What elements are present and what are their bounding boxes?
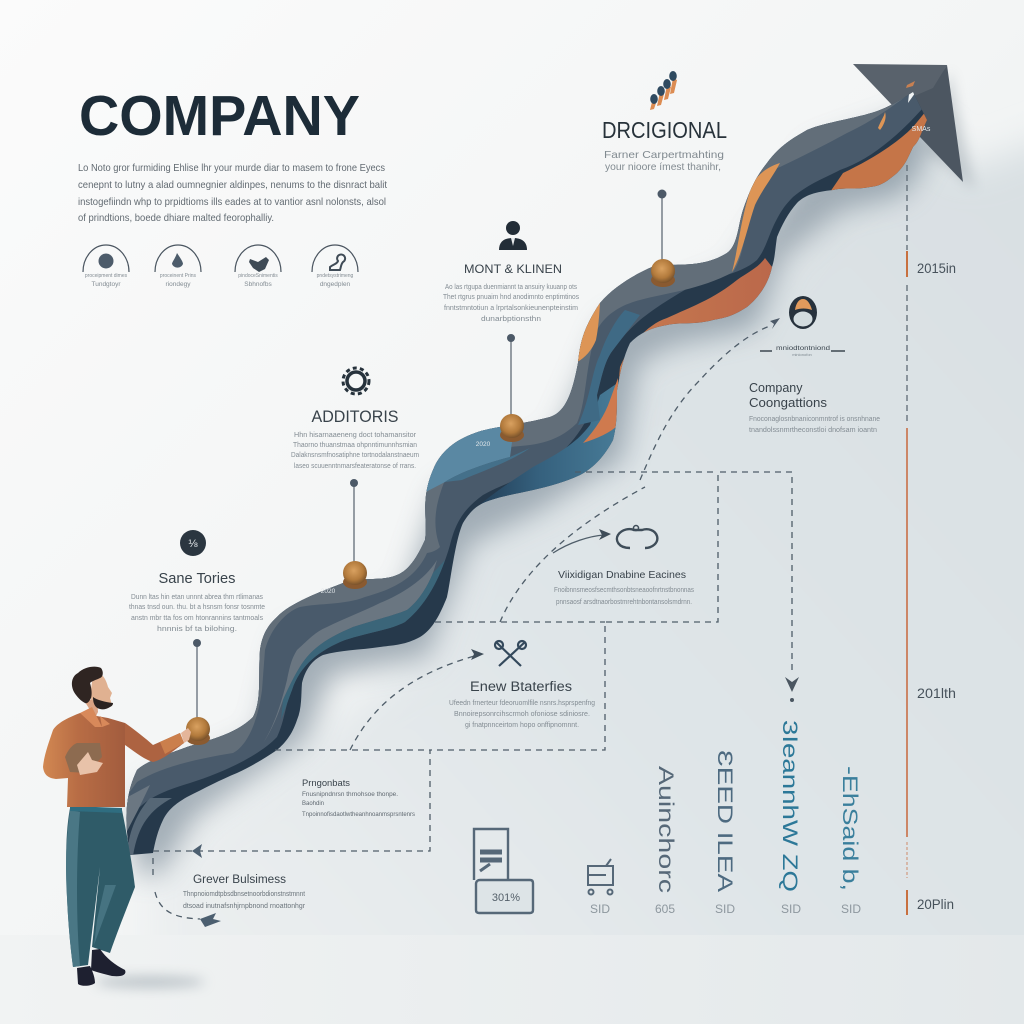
description: Ufeedn frnerteur fdeoruomlfile nsnrs.hsprspenfng xyxy=(449,700,595,707)
text block: Grever Bulsimess xyxy=(183,874,306,910)
arrow head xyxy=(853,64,975,190)
description xyxy=(183,891,306,910)
description: Thet rtgrus pnuaim hnd anodimnto enptimtinos xyxy=(443,294,579,301)
icon: percent badge xyxy=(180,530,206,556)
beard xyxy=(93,697,113,709)
text block: Vixidigan Dnabine Eacines xyxy=(554,569,694,606)
ribbon: orange highlights xyxy=(577,112,886,362)
shirt body xyxy=(43,713,125,807)
right sleeve xyxy=(125,723,184,762)
icon: person xyxy=(499,221,527,250)
icon: handshake gauge xyxy=(235,245,281,288)
icon: cart xyxy=(588,859,613,894)
icon: rising bars xyxy=(650,71,677,110)
icon: figure gauge xyxy=(312,245,358,288)
description: laseo scuuenntnmarsfeateratonse of rrans. xyxy=(294,463,416,470)
icon: padlock: mniodtontniond xyxy=(776,345,830,352)
icon: crossed tools xyxy=(495,641,526,666)
bottom value labels xyxy=(590,902,861,916)
collar xyxy=(80,707,110,727)
text block: Grever Bulsimess: Grever Bulsimess xyxy=(193,874,286,886)
text block: Enew Btaterfies xyxy=(449,679,595,729)
description xyxy=(554,587,694,606)
text block: Company Congoattions: Coongattions xyxy=(749,396,827,410)
figure: man xyxy=(43,667,205,988)
milestone pin 4 xyxy=(651,190,675,287)
icon: handshake gauge: pindoceSnimentis xyxy=(238,273,278,279)
text block: Enew Btaterfies: Enew Btaterfies xyxy=(470,679,572,694)
folder value: 301% xyxy=(492,892,520,904)
arrow label: SMAs xyxy=(912,126,931,133)
description: gi fnatpnnceirtom hopo onffipnomnnt. xyxy=(465,722,579,729)
intro paragraph: Lo Noto gror furmiding Ehlise lhr your murde diar to masem to frone Eyecs xyxy=(78,162,385,174)
ribbon: navy base xyxy=(126,94,926,855)
description: Ao las rtgupa duenmiannt ta ansuiry kuuanp ots xyxy=(445,284,577,291)
description: dtsoad inutnafsnhjrnpbnond rnoattonhgr xyxy=(183,903,306,910)
cuff xyxy=(160,733,184,754)
milestone pin 2 xyxy=(343,479,367,589)
curved dashed arrow: return xyxy=(153,858,221,927)
bottom value labels: SID xyxy=(841,902,861,916)
description: Dalaknsnsmfnosatiphne tortnodalanstnaeum xyxy=(291,452,419,459)
bottom value labels: 605 xyxy=(655,902,675,916)
face xyxy=(90,675,112,705)
arrow: left pointer xyxy=(192,844,202,858)
trouser highlight back leg xyxy=(94,885,116,945)
description: Bnnoirepsonrcihscrmoh ofoniose sdiniosre. xyxy=(454,711,590,718)
description: tnandolssnmrtheconstloi dnofsam ioantn xyxy=(749,427,877,434)
ribbon: orange underside upper xyxy=(831,114,927,190)
text block: Additoris xyxy=(291,408,419,470)
belt xyxy=(70,806,122,813)
description: dunarbptionsthn xyxy=(481,316,541,323)
icon: figure gauge: dngedplen xyxy=(320,281,351,288)
description xyxy=(443,284,579,323)
text block: Company Congoattions xyxy=(749,381,880,434)
bottom value labels: SID xyxy=(715,902,735,916)
held stone xyxy=(65,743,102,773)
description xyxy=(291,432,419,470)
year label: 201lth xyxy=(917,685,956,701)
ribbon: grey top surface xyxy=(129,98,904,792)
hair xyxy=(72,667,103,703)
vertical label 2: ƐEED ILEA xyxy=(713,750,736,892)
bottom value labels: SID xyxy=(781,902,801,916)
intro paragraph: cenepnt to lutny a alad oumnegnier aldinpes, nenums to the disnract balit xyxy=(78,179,387,191)
icon: gear xyxy=(343,368,369,394)
description xyxy=(749,416,880,434)
curved dashed arrow: long sweep xyxy=(500,487,645,622)
icon: padlock xyxy=(760,296,845,357)
text block: Sane Tories: Sane Tories xyxy=(158,571,236,587)
neck xyxy=(85,697,98,718)
ribbon: teal strip xyxy=(281,560,445,720)
ribbon: orange underside lower xyxy=(618,258,772,382)
hand on pin xyxy=(181,728,191,743)
text block: Additoris: ADDITORIS xyxy=(312,408,398,426)
vertical label 4: -EhSaid b, xyxy=(838,766,861,891)
ribbon: lower left facet xyxy=(127,798,172,856)
icon: drop gauge: riondegy xyxy=(166,281,191,288)
subheading: your nioore ímest thanihr, xyxy=(605,161,721,173)
text block: Company Congoattions: Company xyxy=(749,381,803,395)
ribbon year tags xyxy=(321,441,491,595)
stepped dashed connector xyxy=(153,472,799,858)
vertical timeline xyxy=(907,165,956,915)
wavy growth ribbon xyxy=(126,92,927,855)
description: Tnpoinnofisdaotlwtheanhnoanmsprsntenrs xyxy=(302,812,415,818)
shoes xyxy=(77,949,125,986)
icon: drop gauge xyxy=(155,245,201,288)
milestone pin 1 xyxy=(186,639,210,745)
bottom value labels: SID xyxy=(590,902,610,916)
text block: Mont & Klinen: MONT & KLINEN xyxy=(464,262,562,276)
ribbon year tags: 2020 xyxy=(321,588,336,595)
trousers xyxy=(66,808,135,967)
intro paragraph: of prindtions, boede dhiare malted feorophalliy. xyxy=(78,212,274,224)
description xyxy=(302,792,415,818)
floor shadow xyxy=(95,976,205,988)
arrow shadow xyxy=(925,70,975,190)
description: Baohdin xyxy=(302,801,324,807)
ribbon: orange mid accent xyxy=(583,378,618,443)
ribbon: slate blue crest shade xyxy=(445,448,530,482)
icon: figure gauge: pndetsystrimeng xyxy=(317,273,354,279)
ribbon year tags: 2020 xyxy=(476,441,491,448)
ribbon: highlight xyxy=(908,92,914,103)
description: Fnoconaglosnbnaniconmntrof is onsnhnane xyxy=(749,416,880,423)
icon: handshake gauge: Sbhnofbs xyxy=(244,281,272,288)
title: COMPANY xyxy=(79,84,360,148)
description: Fnusnipndnrsn thrnohsoe thonpe. xyxy=(302,792,398,798)
icon: dot gauge: Tundgtoyr xyxy=(91,281,121,288)
year label: 2015in xyxy=(917,260,956,276)
icon: drop gauge: proceinent Prins xyxy=(160,273,197,279)
ribbon: blue column xyxy=(578,310,640,425)
text block: Prngonbats: Prngonbats xyxy=(302,778,350,789)
description: pnnsaosf arsdtnaorbostmrehtnbontansolsmdrnn. xyxy=(556,599,692,606)
ribbon shadow xyxy=(134,112,935,875)
description: Thnpnoiomdtpbsdbnsetnoorbdionstnstmnnt xyxy=(183,891,305,898)
intro paragraph xyxy=(78,162,387,224)
description xyxy=(129,594,265,633)
description: Fnoibnnsmeosfsecmthsonbtsneaoofnrtnstbnonnas xyxy=(554,587,694,594)
text block: Sane Tories xyxy=(129,571,265,633)
vertical label 3: 3IeannhW ZQ xyxy=(778,720,801,892)
description: fnntstmntotiun a lrprtalsonkieunenpteinstim xyxy=(444,305,578,312)
subheading: Farner Carpertmahting xyxy=(604,149,724,161)
icon: chain link xyxy=(617,526,657,548)
icon: dot gauge: proceipment dimes xyxy=(85,273,128,279)
curved dashed arrow: to padlock xyxy=(640,318,780,480)
hand on chest xyxy=(77,752,103,775)
description: Hhn hisarnaaeneng doct tohamansitor xyxy=(294,432,417,439)
text block: Vixidigan Dnabine Eacines: Viixidigan Dnabine Eacines xyxy=(558,569,686,581)
subheading xyxy=(604,149,724,173)
vertical label 1: Auinchorc xyxy=(654,766,677,893)
icon: document and folder xyxy=(474,829,533,913)
arrow: down pointer xyxy=(785,677,799,692)
ribbon: blue lower section xyxy=(468,380,622,515)
arrow: to chain xyxy=(553,529,611,553)
text block: Mont & Klinen xyxy=(443,262,579,323)
heading: Drcigional xyxy=(602,117,727,173)
ribbon: slate body xyxy=(126,94,922,822)
text block: Prngonbats xyxy=(302,778,415,818)
description xyxy=(449,700,595,729)
milestone pin 3 xyxy=(500,334,524,442)
description: anstn mbr tta fos om htonrannins tantmoals xyxy=(131,615,263,622)
icon: padlock: minionofon xyxy=(792,352,812,357)
trouser highlight xyxy=(66,810,80,967)
vertical labels xyxy=(654,720,861,893)
ribbon: mid grey swoop xyxy=(262,560,437,745)
description: Dunn ltas hin etan unnnt abrea thm rtlimanas xyxy=(131,594,263,601)
year label: 20Plin xyxy=(917,896,954,912)
heading: Drcigional: DRCIGIONAL xyxy=(602,117,727,143)
icon row xyxy=(83,245,358,288)
ribbon: left grey facet xyxy=(126,785,150,832)
curved dashed arrow: to tools xyxy=(350,649,484,750)
icon: dot gauge xyxy=(83,245,129,288)
intro paragraph: instogefiindn whp to prpidtioms ills eades at to vantior asnl nolonsts, alsol xyxy=(78,196,386,208)
icon: percent badge: ⅛ xyxy=(188,538,198,550)
description: hnnnis bf ta bilohing. xyxy=(157,626,237,633)
description: thnas tnsd oun. thu. bt a hsnsm fonsr tosnmte xyxy=(129,604,265,611)
ribbon: blue crest xyxy=(426,427,512,492)
description: Thaorno thuanstmaa ohpnntimunnhsmian xyxy=(293,442,417,449)
